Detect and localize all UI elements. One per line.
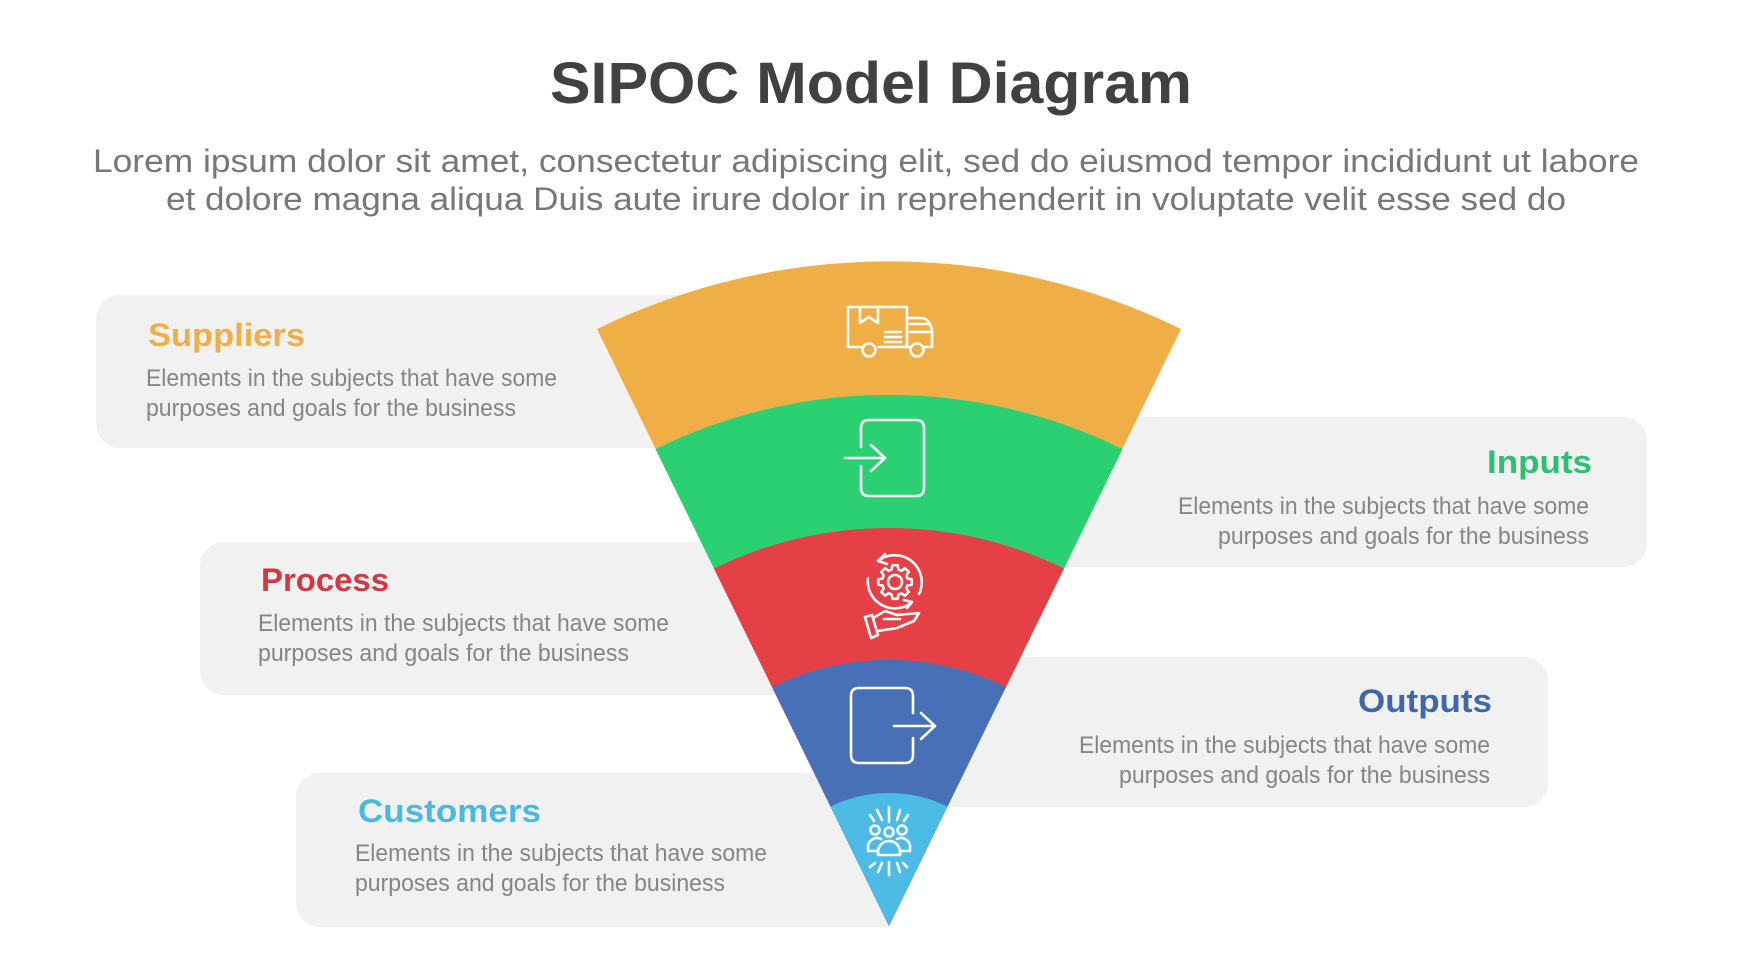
icon: delivery truck — [848, 307, 932, 356]
funnel band: customers — [830, 793, 948, 926]
subtitle: et dolore magna aliqua Duis aute irure dolor in reprehenderit in voluptate velit esse sed do — [166, 181, 1566, 217]
process description — [258, 610, 669, 667]
icon: customers group — [868, 807, 910, 875]
funnel band: process — [714, 528, 1064, 926]
inputs description: Elements in the subjects that have some — [1178, 493, 1589, 520]
customers heading: Customers — [358, 793, 541, 829]
outputs description — [1079, 732, 1490, 789]
suppliers description: purposes and goals for the business — [146, 395, 516, 422]
funnel band: inputs — [656, 395, 1122, 926]
inputs description: purposes and goals for the business — [1218, 523, 1589, 550]
inputs heading: Inputs — [1487, 444, 1592, 480]
suppliers heading: Suppliers — [148, 317, 305, 353]
panel: outputs — [920, 657, 1548, 807]
process heading: Process — [261, 562, 389, 598]
funnel band: outputs — [772, 660, 1006, 926]
inputs background — [1040, 417, 1647, 567]
subtitle — [93, 143, 1639, 217]
customers description — [355, 840, 767, 897]
outputs background — [920, 657, 1548, 807]
panel: customers — [296, 773, 889, 927]
funnel band: suppliers — [597, 261, 1181, 926]
process description: purposes and goals for the business — [258, 640, 629, 667]
subtitle: Lorem ipsum dolor sit amet, consectetur adipiscing elit, sed do eiusmod tempor incididunt ut labore — [93, 143, 1639, 179]
customers background — [296, 773, 889, 927]
suppliers description — [146, 365, 557, 422]
outputs description: Elements in the subjects that have some — [1079, 732, 1490, 759]
icon: input arrow — [845, 420, 924, 496]
panel: inputs — [1040, 417, 1647, 567]
suppliers background — [96, 295, 720, 448]
customers description: Elements in the subjects that have some — [355, 840, 767, 867]
outputs heading: Outputs — [1358, 683, 1492, 719]
icon: output arrow — [851, 688, 935, 763]
funnel diagram — [597, 261, 1181, 926]
panel: suppliers — [96, 295, 720, 448]
inputs description — [1178, 493, 1589, 550]
process description: Elements in the subjects that have some — [258, 610, 669, 637]
customers description: purposes and goals for the business — [355, 870, 725, 897]
suppliers description: Elements in the subjects that have some — [146, 365, 557, 392]
icon: process gear and hand — [865, 554, 922, 638]
title: SIPOC Model Diagram — [550, 51, 1192, 116]
outputs description: purposes and goals for the business — [1119, 762, 1490, 789]
process background — [200, 542, 820, 695]
panel: process — [200, 542, 820, 695]
